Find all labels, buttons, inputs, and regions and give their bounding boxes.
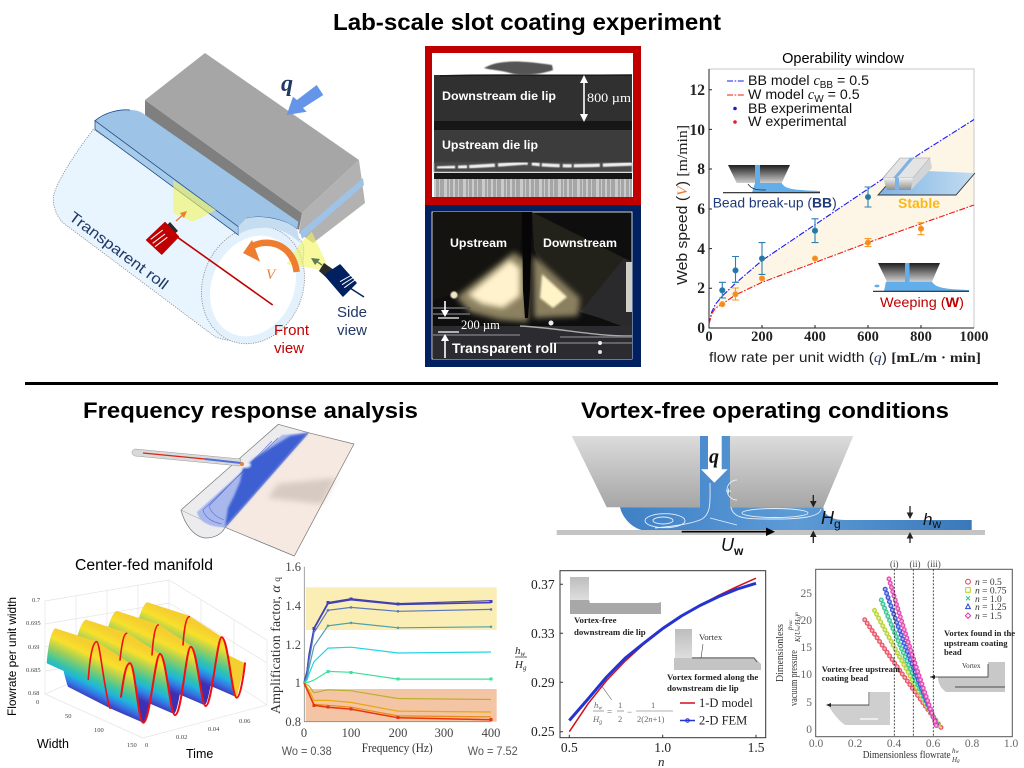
arrow: web velocity: U: [721, 535, 734, 555]
gap height marker: H: [821, 508, 834, 528]
data markers: [312, 598, 492, 721]
axes: 0: [697, 320, 705, 337]
inset: vortex in upstream bead: Vortex found in the: [944, 628, 1015, 638]
3D tick labels: 0.68: [28, 690, 39, 697]
arrow: flow q: q: [281, 71, 293, 97]
3D tick labels: 50: [65, 713, 72, 720]
3D tick labels: [26, 597, 251, 749]
inset: weeping: Weeping (W): [880, 294, 964, 310]
tick labels: 1.0: [654, 740, 671, 755]
inset: vortex along downstream lip: [667, 629, 761, 693]
tick labels: 1.2: [285, 638, 301, 652]
axis labels: [774, 612, 960, 764]
axis labels: w: [520, 650, 526, 658]
axis labels: Hg: [951, 756, 960, 764]
orange band: [306, 689, 497, 722]
axis labels: Dimensionless flowrate: [863, 749, 951, 761]
data series: [304, 599, 491, 720]
legend: n = 1.0: [975, 595, 1002, 605]
tick labels: 0.8: [285, 715, 301, 729]
BB model curve: [709, 120, 974, 324]
panel: front-view photograph: [425, 46, 641, 205]
formula: g: [599, 720, 602, 726]
gap height marker: g: [834, 517, 841, 531]
inset: vortex in upstream bead: [930, 628, 1015, 692]
2-D FEM curve: [569, 583, 756, 720]
axes: 0: [705, 329, 713, 345]
3D tick labels: 0.02: [176, 734, 187, 741]
axis labels: [514, 645, 664, 768]
film thickness marker: [907, 506, 941, 543]
legend: n = 1.25: [975, 603, 1007, 613]
arrow: flow q: q: [709, 446, 719, 468]
streamlines: [645, 480, 821, 528]
label: front view: view: [274, 340, 304, 357]
arrow: web velocity: [682, 528, 775, 558]
chart: vacuum pressure vs flowrate: [774, 559, 1018, 764]
substrate: [557, 530, 985, 535]
formula: H: [593, 714, 599, 724]
legend: 1-D model: [699, 696, 753, 710]
arrow: 800 micron dimension: 800 µm: [587, 90, 631, 105]
light cones: [173, 180, 327, 270]
transparent roll: [53, 129, 322, 359]
axes: 400: [804, 329, 826, 345]
tick labels: [800, 588, 1018, 750]
axis labels: h: [515, 645, 520, 657]
slot die block: [145, 53, 365, 243]
formula: w: [598, 706, 602, 712]
tick labels: 25: [800, 588, 812, 600]
y axis label: Amplification factor, α q: [268, 576, 283, 714]
arrow: roll rotation V: V: [266, 267, 277, 283]
axis labels: vacuum pressure: [789, 650, 800, 706]
tick labels: 15: [800, 642, 812, 654]
legend: = 0.5: [833, 73, 869, 89]
label: side view: view: [337, 322, 367, 339]
chart: 3D flowrate surface: [5, 580, 267, 761]
arrow: roll rotation V: [243, 240, 297, 283]
3D tick labels: 0.04: [208, 726, 220, 733]
tick labels: 0.6: [926, 738, 940, 750]
axes: 10: [690, 122, 705, 139]
illustration: slot die over transparent roll: [53, 53, 367, 359]
chart: film thickness ratio vs n: [514, 571, 766, 768]
heading: vortex-free operating conditions: Vortex-free operating conditions: [581, 398, 949, 423]
Womersley label left: Wo = 0.38: [282, 744, 332, 758]
arrow: flow q: [281, 71, 323, 115]
axes: [690, 69, 988, 345]
formula: 2(2n+1): [637, 714, 665, 724]
label: front view: Front: [274, 322, 309, 339]
axes: 8: [697, 161, 705, 178]
tick labels: 0.4: [887, 738, 901, 750]
tick labels: 5: [806, 697, 812, 709]
inset: stable: Stable: [898, 196, 941, 211]
inset: weeping: [873, 263, 969, 310]
gap height marker: [810, 495, 841, 543]
inset: bead break-up: [713, 165, 837, 211]
arrows: 200 micron gap: [438, 301, 500, 358]
chart: amplification factor: [268, 560, 518, 758]
reference lines: [890, 559, 941, 737]
ticks: [560, 584, 756, 738]
axes: 2: [697, 280, 705, 297]
axis labels: H: [515, 659, 523, 671]
axis labels: Dimensionless: [774, 624, 786, 682]
axis labels: g: [523, 664, 527, 672]
inset: vortex-free upstream bead: Vortex-free upstream: [822, 664, 901, 674]
formula: −: [627, 707, 632, 717]
tick labels: 200: [389, 726, 407, 740]
tick labels: 0.25: [531, 724, 555, 739]
formula: 2: [618, 714, 622, 724]
inset: vortex-free downstream: Vortex-free: [574, 615, 617, 625]
label: upstream: Upstream: [450, 236, 507, 250]
tick labels: 0.2: [848, 738, 862, 750]
3D tick labels: 0: [36, 699, 39, 706]
tick labels: 1.0: [1004, 738, 1018, 750]
axis labels: pvac: [786, 619, 794, 631]
arrow: flow q: [701, 436, 728, 483]
tick labels: 300: [435, 726, 453, 740]
3D grid: [45, 580, 267, 738]
axis labels: K(Uw/Hg): [794, 615, 802, 642]
illustration: center-fed manifold mesh: [132, 424, 354, 556]
coating bead: [95, 110, 300, 243]
label: upstream die lip: Upstream die lip: [442, 138, 538, 152]
y axis label: Web speed (V) [m/min]: [675, 125, 691, 285]
tick labels: 0.33: [531, 626, 555, 641]
tick labels: [531, 577, 765, 755]
3D tick labels: 0.06: [239, 718, 251, 725]
axes: 600: [857, 329, 879, 345]
label: downstream: Downstream: [543, 236, 617, 250]
title: lab-scale experiment: Lab-scale slot coating experiment: [333, 9, 721, 35]
red traces: [88, 617, 245, 723]
tick labels: 0.0: [809, 738, 823, 750]
tick labels: 0.37: [531, 577, 555, 592]
divider: [25, 382, 998, 385]
Womersley label right: Wo = 7.52: [468, 744, 518, 758]
chart title: Operability window: [782, 51, 904, 67]
tick labels: 0.8: [965, 738, 979, 750]
axis label: flowrate: Flowrate per unit width: [5, 597, 19, 716]
formula: 1: [618, 700, 622, 710]
film thickness marker: w: [931, 517, 941, 531]
legend: n = 1.5: [975, 612, 1002, 622]
surface ridges: [47, 602, 245, 723]
label: side view: Side: [337, 304, 367, 321]
tick labels: 400: [482, 726, 500, 740]
tick labels: 10: [800, 669, 812, 681]
3D tick labels: 150: [127, 742, 137, 749]
tick labels: [285, 560, 500, 740]
inset: vortex in upstream bead: upstream coating: [944, 638, 1008, 648]
legend: W model c: [748, 87, 814, 103]
formula: =: [607, 707, 612, 717]
formula: 1: [651, 700, 655, 710]
inset: vortex-free upstream bead: [822, 664, 901, 725]
3D tick labels: 0: [145, 742, 148, 749]
arrow: 800 micron dimension: [580, 75, 631, 122]
tick labels: 1.5: [748, 740, 765, 755]
inset: vortex-free downstream: downstream die lip: [574, 627, 646, 637]
yellow band: [306, 587, 497, 630]
arrows: 200 micron gap: 200 µm: [461, 318, 500, 332]
tick labels: 1.4: [285, 599, 302, 613]
3D tick labels: 0.69: [28, 644, 39, 651]
tick labels: 20: [800, 615, 812, 627]
W experimental points: [720, 223, 924, 307]
axes: 4: [697, 241, 705, 258]
tick labels: 0.5: [561, 740, 578, 755]
axis labels: hw: [952, 747, 960, 755]
heading: frequency response analysis: Frequency response analysis: [83, 398, 418, 423]
legend: BB: [820, 80, 833, 91]
axes: [304, 567, 491, 722]
legend: = 0.5: [824, 87, 860, 103]
panel: side-view photograph: [425, 205, 641, 367]
axis label: width: Width: [37, 737, 69, 751]
W model curve: [709, 205, 974, 324]
inset: vortex-free downstream: [570, 577, 661, 637]
legend: W: [814, 94, 824, 105]
axis labels: n: [795, 612, 800, 615]
formula: h: [594, 700, 598, 710]
legend: [680, 696, 753, 728]
stable region shading: [709, 120, 974, 324]
tick labels: 0: [301, 726, 307, 740]
tick labels: 1: [295, 676, 301, 690]
reference lines: (i): [890, 559, 899, 569]
inset: vortex along downstream lip: downstream die lip: [667, 683, 739, 693]
arrow: web velocity: w: [733, 544, 744, 558]
x axis label: Frequency (Hz): [362, 741, 433, 755]
coating fluid: [620, 436, 972, 530]
axes: 6: [697, 201, 705, 218]
legend: 2-D FEM: [699, 714, 747, 728]
legend: [965, 578, 1007, 622]
3D tick labels: 0.685: [26, 667, 41, 674]
3D tick labels: 0.7: [32, 597, 41, 604]
legend: W experimental: [748, 114, 847, 130]
tick labels: 0.29: [531, 675, 555, 690]
x axis label: flow rate per unit width ( q) [mL/m · min]: [709, 349, 981, 366]
axes: 800: [910, 329, 932, 345]
axes: 200: [751, 329, 773, 345]
data series: [865, 579, 942, 728]
plot frame: [560, 571, 766, 738]
inset: stable: [878, 158, 975, 211]
legend: BB experimental: [748, 101, 852, 117]
label: transparent roll: Transparent roll: [66, 209, 171, 293]
BB experimental points: [719, 187, 872, 298]
legend: n = 0.75: [975, 586, 1007, 596]
reference lines: (iii): [927, 559, 941, 569]
axis label: time: Time: [186, 747, 213, 761]
axes: 12: [690, 82, 705, 99]
inset: vortex along downstream lip: Vortex: [699, 632, 723, 642]
1-D model curve: [569, 578, 756, 732]
tick labels: 0: [806, 724, 812, 736]
die halves: [572, 436, 853, 507]
legend: [727, 73, 869, 130]
inset: vortex in upstream bead: Vortex: [962, 662, 981, 670]
legend: BB model c: [748, 73, 820, 89]
plot frame: [816, 569, 1012, 737]
label: downstream die lip: Downstream die lip: [442, 89, 556, 103]
3D tick labels: 0.695: [26, 620, 41, 627]
inset: bead break-up: Bead break-up (BB): [713, 195, 837, 211]
inset: vortex in upstream bead: bead: [944, 647, 962, 657]
tick labels: 1.6: [285, 560, 301, 574]
subheading: center-fed manifold: Center-fed manifold: [75, 557, 213, 574]
label: transparent roll in photo: Transparent roll: [452, 341, 557, 356]
inset: vortex along downstream lip: Vortex formed along the: [667, 672, 758, 682]
film thickness marker: h: [923, 510, 932, 529]
tick labels: 100: [342, 726, 360, 740]
formula: [592, 687, 673, 726]
legend: n = 0.5: [975, 578, 1002, 588]
side-view camera: [311, 258, 364, 297]
inset: vortex-free upstream bead: coating bead: [822, 673, 868, 683]
illustration: slot die flow schematic: [557, 436, 985, 558]
3D tick labels: 100: [94, 727, 104, 734]
reference lines: (ii): [910, 559, 920, 569]
axes: 1000: [960, 329, 988, 345]
front-view camera: [147, 211, 273, 305]
chart: operability window: [675, 51, 988, 366]
